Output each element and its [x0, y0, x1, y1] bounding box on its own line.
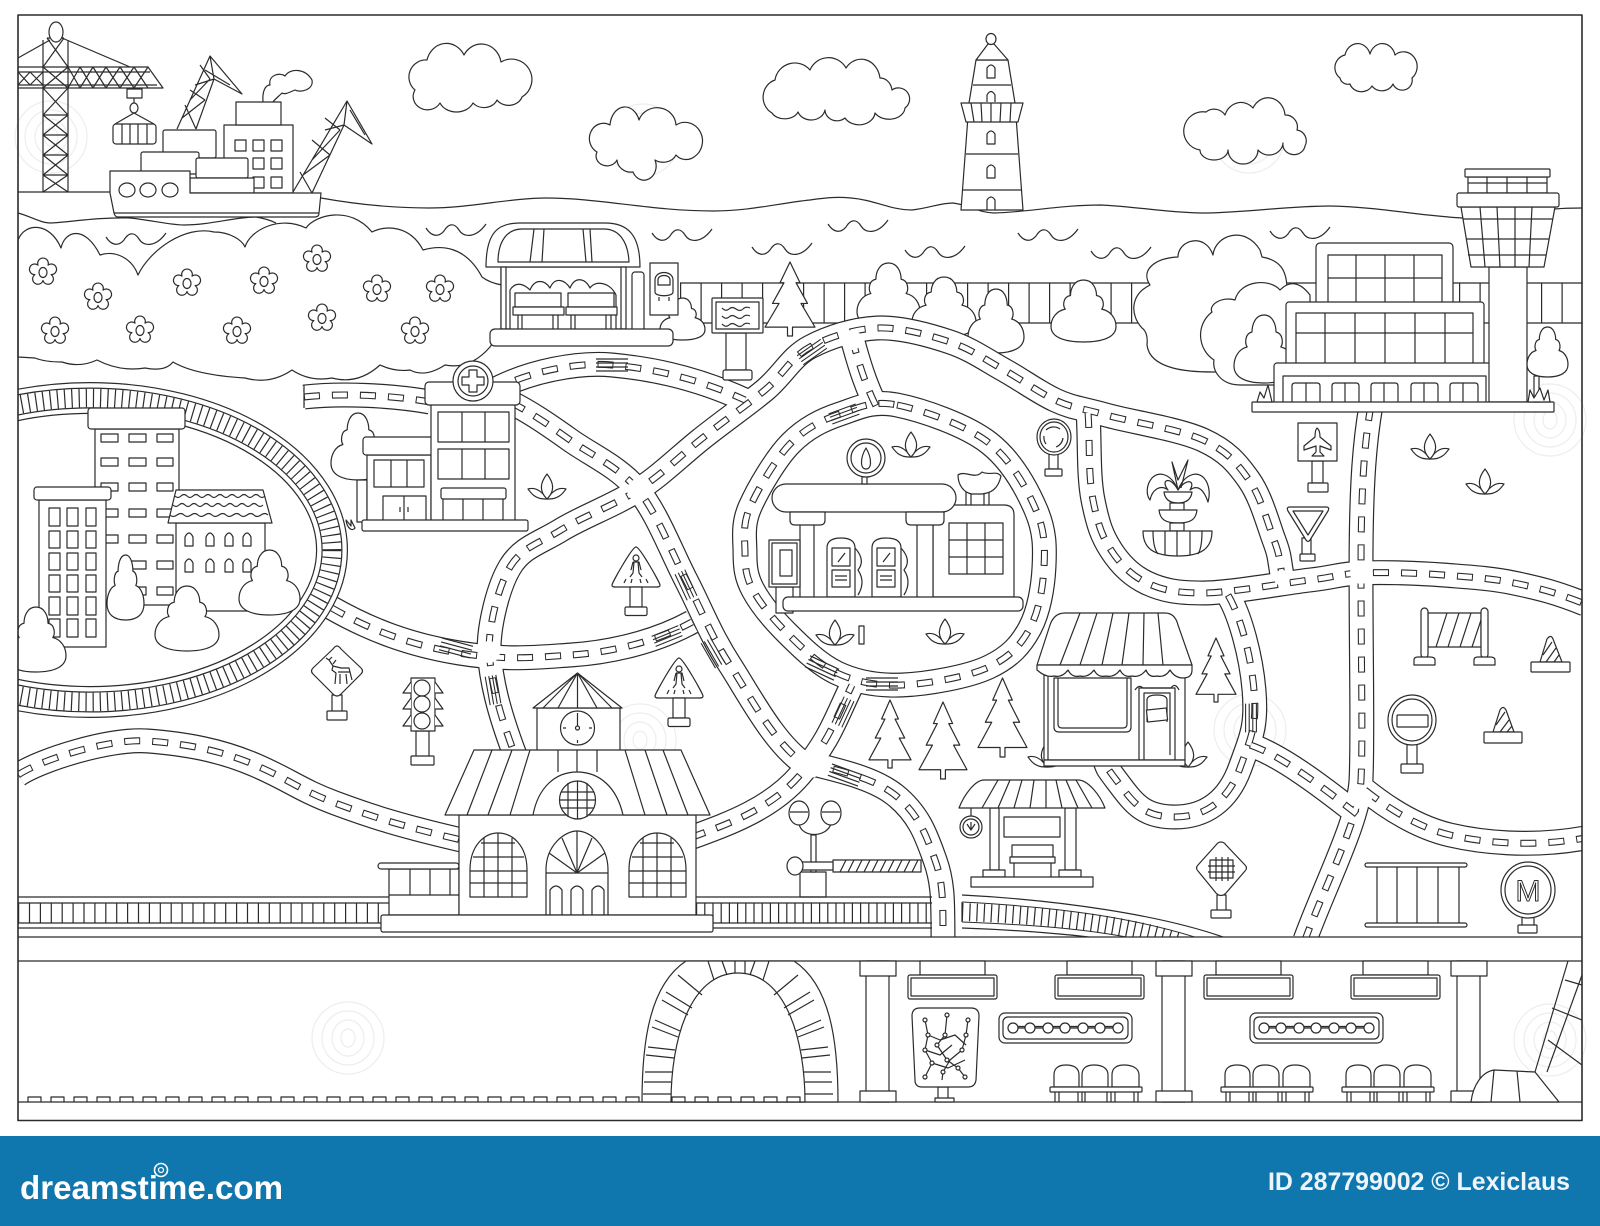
hospital: [346, 361, 528, 531]
train station: [378, 750, 713, 932]
dreamstime logo: dreamstime.com: [20, 1169, 283, 1206]
airport platform: [1252, 402, 1554, 412]
bus stop shelter 2: [959, 780, 1105, 887]
lighthouse: [961, 34, 1023, 210]
cloud 2: [589, 107, 702, 180]
shop: [1037, 613, 1192, 766]
tunnel arch: [642, 961, 838, 1102]
dock crane 2: [177, 56, 242, 129]
metro sign: [1501, 862, 1555, 933]
cloud 1: [409, 43, 532, 112]
moose warning sign: [312, 646, 362, 720]
hospital tree: [331, 413, 385, 522]
road network: [18, 328, 1585, 940]
tiled house: [168, 490, 272, 611]
platform hanging signs: [908, 961, 1440, 999]
airport tree: [1257, 327, 1568, 402]
bush behind front tower: [107, 555, 144, 620]
oval railway: [0, 398, 332, 702]
fountain: [1143, 460, 1212, 556]
back apartment tower: [88, 408, 185, 605]
bus sign: [650, 263, 678, 315]
track ties: [28, 1097, 800, 1102]
dock crane 3: [293, 101, 372, 193]
flower hedge: [18, 215, 502, 380]
platform seats: [1050, 1065, 1434, 1102]
level crossing: [787, 801, 921, 897]
pedestrian sign 2: [655, 658, 703, 726]
clock tower: [533, 673, 622, 752]
watermark spirals: [15, 101, 1586, 1076]
smoke: [263, 70, 312, 102]
bottom rails left: [18, 897, 390, 928]
no entry sign: [1388, 695, 1436, 773]
sea waves: [106, 220, 1330, 258]
cloud 3: [763, 58, 910, 125]
city bushes: [6, 550, 300, 672]
cloud 4: [1335, 44, 1417, 92]
metro sign: M: [1516, 875, 1540, 908]
yield sign: [1287, 507, 1329, 561]
metro line boards: [999, 1013, 1383, 1043]
traffic cone 1: [1531, 636, 1570, 672]
fence: [680, 283, 1582, 323]
metro pillars: [860, 961, 1487, 1102]
bottom rails right: [696, 897, 932, 928]
image id credit: ID 287799002 © Lexiclaus: [1268, 1168, 1570, 1196]
roundabout sign: [1037, 419, 1071, 476]
park bushes: [857, 235, 1310, 385]
traffic cone 2: [1484, 708, 1522, 743]
control tower: [1457, 169, 1559, 402]
gas station: [769, 439, 1023, 613]
front apartment tower: [34, 487, 111, 647]
metro network map: [912, 1008, 979, 1102]
airport: [1274, 243, 1495, 405]
billboard sign: [712, 298, 763, 380]
escalator: [1471, 961, 1582, 1102]
shop pine: [1196, 638, 1236, 702]
grass tufts: [528, 432, 1504, 767]
pedestrian sign 1: [612, 547, 660, 616]
harbour crane: [18, 22, 163, 192]
metro gate: [1365, 863, 1467, 927]
bus stop and bushes: [486, 223, 705, 346]
airplane sign: [1298, 423, 1337, 492]
footer band: [0, 1136, 1600, 1226]
curved rails: [962, 895, 1223, 942]
cargo ship: [110, 102, 321, 217]
warning sign: [1196, 842, 1246, 918]
cloud 5: [1184, 98, 1306, 164]
three pine trees: [869, 678, 1027, 779]
traffic light: [403, 678, 443, 765]
pine tree near billboard: [765, 262, 815, 336]
road barrier: [1414, 608, 1495, 665]
sea shoreline: [18, 192, 1582, 225]
